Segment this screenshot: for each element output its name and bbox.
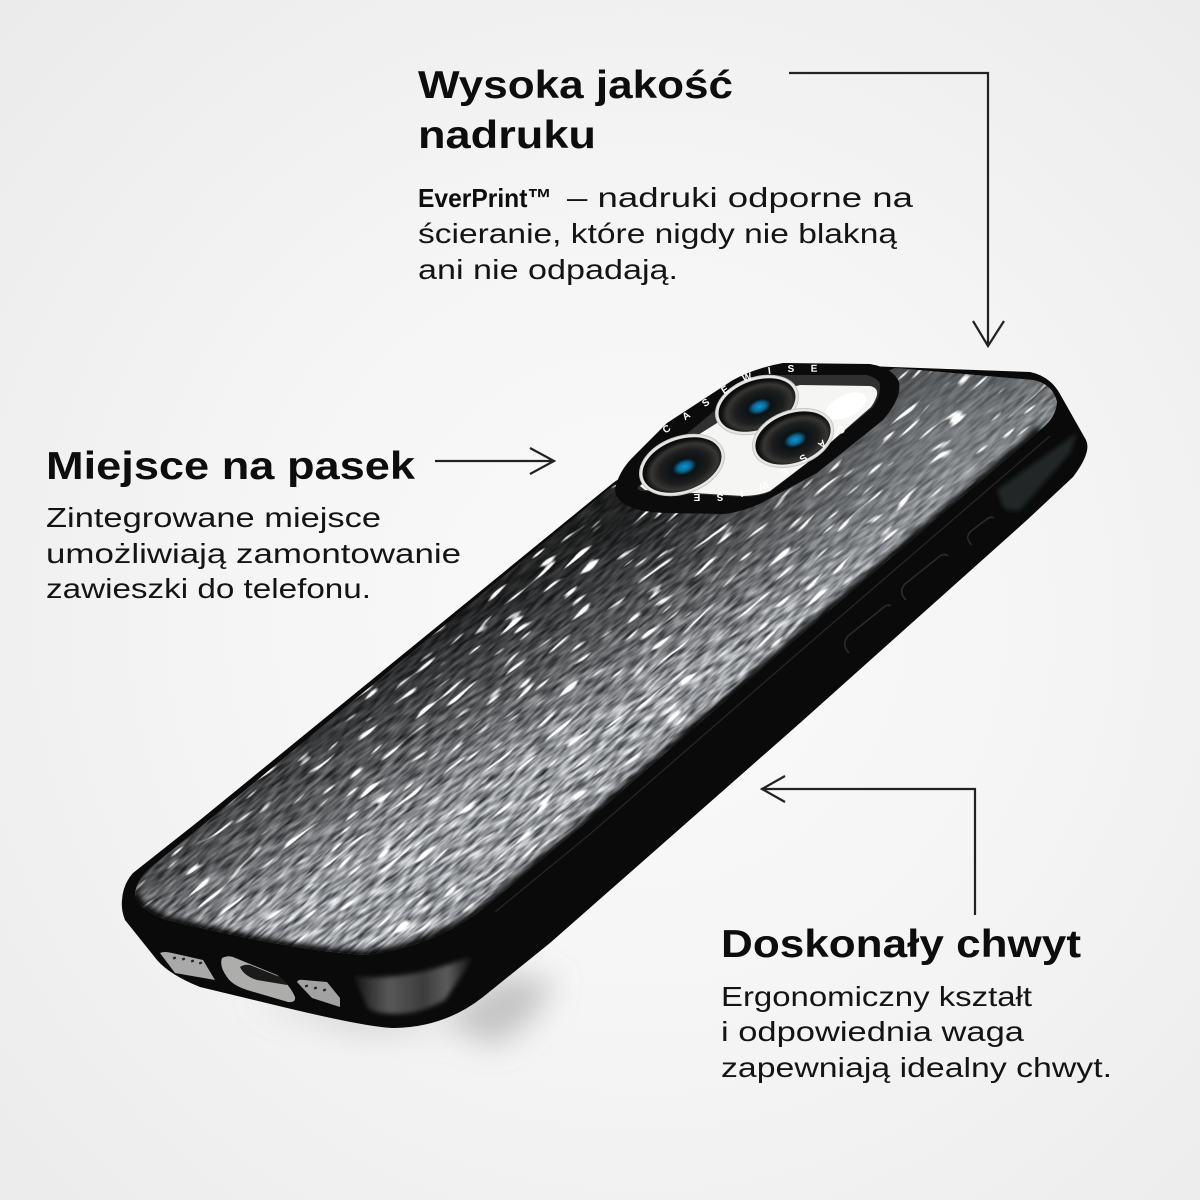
lens right	[744, 398, 842, 478]
case body	[122, 363, 1087, 1028]
lens left	[631, 423, 733, 507]
arrow: grip	[762, 776, 975, 915]
glitter back panel	[135, 368, 1057, 955]
body text: ścieranie, które nigdy nie blakną	[418, 218, 898, 249]
glitter texture	[135, 368, 1057, 955]
bottom ports	[160, 952, 340, 1007]
right speaker grille	[297, 980, 340, 1007]
camera window	[640, 385, 877, 496]
side buttons	[845, 517, 994, 653]
heading: nadruku	[418, 114, 596, 157]
body text: ani nie odpadają.	[418, 254, 678, 285]
arrow: print quality	[789, 73, 1004, 346]
lens top	[707, 364, 807, 446]
charge port	[221, 956, 295, 1002]
body text: Ergonomiczny kształt	[721, 981, 1032, 1012]
body text: umożliwiają zamontowanie	[46, 538, 461, 569]
callout: strap slot	[46, 445, 461, 604]
arrow: strap slot	[435, 448, 554, 474]
body text: zapewniają idealny chwyt.	[721, 1052, 1112, 1083]
body text: zawieszki do telefonu.	[46, 573, 371, 604]
sparkles	[135, 370, 1057, 948]
body text: – nadruki odporne na	[567, 182, 914, 213]
camera bump	[615, 363, 900, 514]
body text	[418, 182, 914, 285]
heading	[418, 64, 733, 157]
heading: Wysoka jakość	[418, 64, 733, 107]
body text	[721, 981, 1112, 1083]
callout: grip	[721, 923, 1112, 1083]
callout: print quality	[418, 64, 914, 285]
body text: EverPrint™	[418, 183, 552, 213]
tone lift right	[729, 368, 1057, 598]
logo bottom: CASEWISE	[694, 426, 845, 501]
side rim line	[495, 436, 1050, 912]
flash	[821, 387, 871, 425]
phone case	[122, 363, 1088, 1028]
body text	[46, 502, 461, 604]
panel inner edge shadow	[135, 430, 1040, 955]
frame inner ring	[638, 375, 880, 497]
bump frame	[615, 363, 899, 514]
side panel sheen	[997, 433, 1077, 511]
tone overlay	[135, 368, 1057, 928]
left speaker grille	[160, 952, 215, 980]
body text: i odpowiednia waga	[721, 1016, 1025, 1047]
heading: Doskonały chwyt	[721, 923, 1081, 966]
logo top: CASEWISE	[663, 364, 818, 432]
heading: Miejsce na pasek	[46, 445, 415, 488]
corner highlight	[354, 957, 471, 1014]
phone shadow	[250, 975, 555, 1045]
body text: Zintegrowane miejsce	[46, 502, 381, 533]
